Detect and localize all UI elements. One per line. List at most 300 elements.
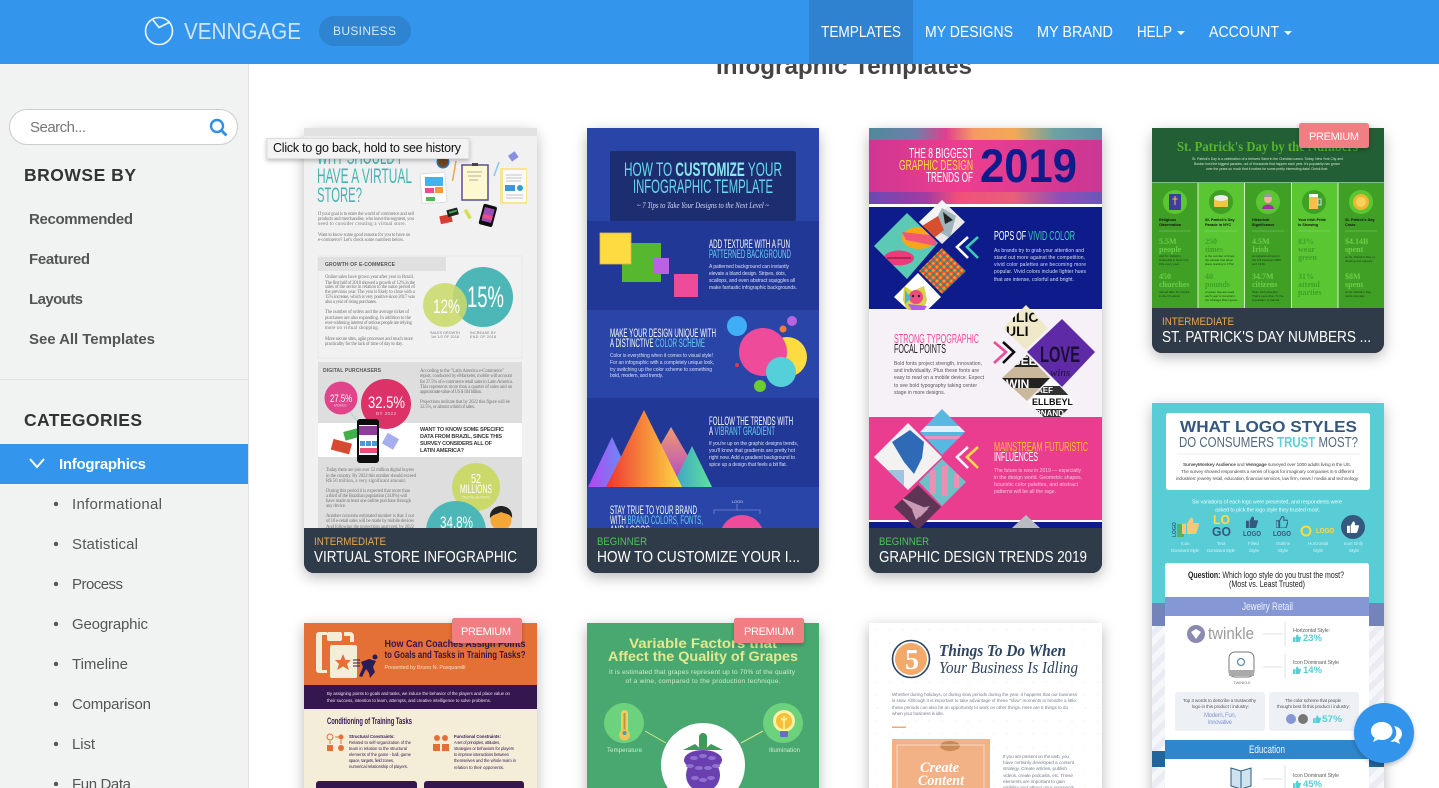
section: mainstream futuristic influences xyxy=(869,409,1102,530)
image: create content: Create xyxy=(920,760,959,776)
section: digital purchasers: for 27.5% of e-commerce retail sales in Latin America. xyxy=(420,380,513,385)
section: conditioning of training tasks: Functional Constraints: xyxy=(454,734,501,739)
thumbnail: idling business xyxy=(876,630,1098,788)
tip: color scheme: MAKE YOUR DESIGN UNIQUE WITH xyxy=(610,326,716,340)
card: what logo styles xyxy=(1152,403,1384,788)
section: strong typographic focal points: easy to read on a mobile device. Expect xyxy=(894,375,985,381)
intro strip: By assigning points to goals and tasks, we induce the behavior of the players and place value on xyxy=(327,691,511,696)
body text: strategy. Create articles, publish xyxy=(1003,766,1067,772)
banner: 8 biggest trends of 2019: TRENDS OF xyxy=(926,169,973,186)
survey panel: 14% xyxy=(1303,665,1322,675)
tip: brand colors: STAY TRUE TO YOUR BRAND xyxy=(610,503,697,517)
categories menu: Process xyxy=(72,576,123,593)
footer: level and title: INTERMEDIATE xyxy=(314,536,386,548)
tip: vibrant gradient xyxy=(587,398,819,487)
title panel: WHAT LOGO STYLES xyxy=(1180,419,1357,436)
section: mainstream futuristic influences: patterns will be all the rage. xyxy=(994,489,1056,495)
tip: brand colors xyxy=(610,500,764,559)
column 5: day costs: drinking and apparel. xyxy=(1345,259,1373,263)
column 1: religious observation: named after St. Patrick xyxy=(1159,290,1190,294)
section: digital purchasers: DATA FROM BRAZIL, SINCE THIS xyxy=(420,434,502,440)
tip: color scheme: For an infographic with a completely unique look, xyxy=(610,360,714,366)
section: conditioning of training tasks: strategies or behaviors for players xyxy=(454,746,514,751)
tip: patterned background xyxy=(587,221,819,310)
tip: patterned background: elevate a bland design. Stripes, dots, xyxy=(709,271,786,277)
section: growth of e-commerce: SALES GROWTH xyxy=(430,331,460,335)
body text: have certainly developed a content xyxy=(1003,760,1075,766)
title: why should I have a virtual store: STORE? xyxy=(317,184,362,207)
tip: color scheme xyxy=(610,316,807,392)
section: mainstream futuristic influences: futuristic color palettes, and abstract xyxy=(994,482,1079,488)
title xyxy=(939,641,1078,677)
survey panel: twinkle xyxy=(1208,624,1254,643)
column 2: parade in NYC: 40 xyxy=(1205,272,1213,281)
column 3: historical significance: citizens xyxy=(1252,280,1277,289)
footer: level and title xyxy=(1152,308,1384,353)
section: conditioning of training tasks: themselves and the whole team in xyxy=(454,758,517,763)
column 3: historical significance xyxy=(1244,183,1291,308)
survey panel: Horizontal Style: xyxy=(1293,628,1330,634)
title panel: industries: jewelry retail, education, financial services, law firm, news / media and technology. xyxy=(1176,476,1359,482)
section: digital purchasers: LATIN AMERICA? xyxy=(420,448,465,454)
column 3: historical significance: population of Ireland. xyxy=(1252,298,1280,302)
logo style icons: LOGO xyxy=(1316,528,1334,535)
section: digital purchasers: R$ 50 million, a very significant amount. xyxy=(326,479,406,484)
section: digital purchasers: DIGITAL PURCHASERS xyxy=(323,368,382,374)
section: digital purchasers: 27.5% xyxy=(330,393,352,405)
categories menu xyxy=(0,410,248,788)
categories menu: Statistical xyxy=(72,536,138,553)
intro text xyxy=(609,669,796,685)
section: conditioning of training tasks: team in relation to the structural xyxy=(349,746,407,751)
title: Variable Factors that xyxy=(629,635,777,651)
section: digital purchasers: 34.8% xyxy=(440,513,473,532)
tip: vibrant gradient: spice up a design that feels a bit flat. xyxy=(709,462,787,468)
logo style labels: Dominant Style xyxy=(1207,548,1235,553)
card: how to customize your infographic xyxy=(587,128,819,573)
thumbnail: st patrick's day: Boston host the biggest parades, out of thousands that happen each year. It's popularity has grown xyxy=(1194,162,1340,166)
section: growth of e-commerce: More secure sites, agile processes and much more xyxy=(325,337,413,342)
banner: 8 biggest trends of 2019 xyxy=(869,128,1102,204)
sidebar xyxy=(0,64,249,788)
card: coaches training tasks xyxy=(304,618,537,788)
survey panel xyxy=(1165,563,1369,788)
browse by menu: Layouts xyxy=(29,291,83,308)
section: pops of vivid color xyxy=(869,199,1102,320)
section: growth of e-commerce: 15% increase, which is very positive since 2017 was xyxy=(325,295,415,300)
logo style labels: Outline xyxy=(1276,541,1291,546)
card: variable factors of grapes xyxy=(587,618,819,788)
column 2: parade in NYC: is the number of times xyxy=(1205,254,1235,258)
icons: desk illustration xyxy=(420,151,527,227)
section: digital purchasers: MOBILE xyxy=(334,404,348,408)
thumbnail: coaches xyxy=(304,623,537,788)
column 4: your irish pride: Your Irish Pride xyxy=(1298,218,1326,222)
column 3: historical significance: Irish xyxy=(1252,245,1269,254)
section: digital purchasers: During this period it is expected that more than xyxy=(326,489,411,494)
section: growth of e-commerce: The number of orders and the average ticket of xyxy=(325,310,409,315)
section: strong typographic focal points: to see bold typography taking center xyxy=(894,383,977,389)
section: digital purchasers: Projections indicate that by 2022 this figure will be xyxy=(420,400,510,405)
column 2: parade in NYC: times xyxy=(1205,245,1223,254)
tooltip: back button hint xyxy=(267,138,469,158)
column 5: day costs: $4.14B xyxy=(1345,237,1369,246)
section: pops of vivid color: As brands try to grab your attention and xyxy=(994,248,1084,254)
section: conditioning of training tasks: Conditioning of Training Tasks xyxy=(327,716,412,726)
survey panel: Education xyxy=(1249,744,1285,756)
section: conditioning of training tasks: A set of principles, attitudes, xyxy=(454,740,500,745)
factor: illumination xyxy=(763,703,803,754)
nav menu: TEMPLATES xyxy=(821,24,901,41)
column 2: parade in NYC: each year to transform xyxy=(1205,294,1236,298)
thumbnail: st patrick's day: St. Patrick's Day is a celebration of a beloved Saint in the Christian canon. Today, New York City and xyxy=(1192,157,1343,161)
column 1: religious observation: Cathedral in New York xyxy=(1159,258,1189,262)
browse by menu: See All Templates xyxy=(29,331,155,348)
section: digital purchasers: DIGITAL BUYERS xyxy=(462,496,490,500)
connector lines xyxy=(645,731,763,743)
tip: vibrant gradient: right now. Add a gradient background to xyxy=(709,455,795,461)
badge: premium: PREMIUM xyxy=(461,626,511,638)
section: mainstream futuristic influences: The future is now in 2019 — especially xyxy=(994,468,1082,474)
footer: level and title: HOW TO CUSTOMIZE YOUR I... xyxy=(597,549,800,566)
intro text: these periods can also be an opportunity to work on other things. Here are 5 things to do xyxy=(892,705,1068,710)
icon: grape bunch xyxy=(661,723,745,788)
column 2: parade in NYC: pounds xyxy=(1205,280,1230,289)
footer: level and title xyxy=(869,528,1102,573)
logo style icons: GO xyxy=(1212,524,1231,539)
title panel xyxy=(1166,413,1370,490)
section: conditioning of training tasks: space, targets, field zones, xyxy=(349,758,394,763)
tip: patterned background: make fantastic infographic backgrounds. xyxy=(709,285,797,291)
column 5: day costs: spent xyxy=(1345,280,1364,289)
section: strong typographic focal points: STRONG TYPOGRAPHIC xyxy=(894,331,979,346)
section: strong typographic focal points: AEF xyxy=(1037,386,1053,395)
section: strong typographic focal points: FOCAL POINTS xyxy=(894,341,946,356)
title panel: SurveyMonkey Audience and Venngage surveyed over 1000 adults living in the US. xyxy=(1183,462,1351,468)
title panel: The survey showed respondents a series of logos for imaginary companies in 6 different xyxy=(1181,469,1355,475)
section: strong typographic focal points: Bold fonts project strength, innovation, xyxy=(894,361,982,367)
column 4: your irish pride: Is Showing xyxy=(1298,223,1319,227)
column 1: religious observation: Observation xyxy=(1159,223,1182,227)
factor: temperature xyxy=(604,703,644,754)
nav menu xyxy=(809,0,1292,64)
search box xyxy=(10,110,238,144)
categories menu: List xyxy=(72,736,96,753)
badge: business xyxy=(319,16,411,46)
intro text: of a wine, compared to the production technique. xyxy=(626,678,781,685)
card: st patrick's day numbers xyxy=(1152,123,1384,353)
banner: 8 biggest trends of 2019: GRAPHIC DESIGN xyxy=(899,157,973,174)
footer: level and title xyxy=(587,528,819,573)
intro text: is slow. Although it is important to take advantage of these "slow" moments to breathe a little, xyxy=(892,698,1077,703)
section: digital purchasers: a third of the Brazilian population (34.8%) will xyxy=(326,494,408,499)
logo style icons: LOGO xyxy=(1172,522,1178,537)
categories menu: Timeline xyxy=(72,656,128,673)
tip: patterned background: scallops, and even abstract squiggles all xyxy=(709,278,795,284)
body text: If you are present on the web, you xyxy=(1003,754,1069,760)
section: strong typographic focal points: WIN xyxy=(1006,377,1029,391)
section: growth of e-commerce: more on virtual shopping. xyxy=(325,326,379,331)
logo style labels: Horizontal xyxy=(1308,541,1328,546)
body text: videos, create podcasts, etc. These xyxy=(1003,773,1073,779)
logo: venngage xyxy=(146,18,301,44)
column 5: day costs: cards annually. xyxy=(1345,294,1365,298)
column 3: historical significance: the US between 1820 xyxy=(1252,258,1281,262)
column 1: religious observation: people xyxy=(1159,245,1182,254)
badge: business: BUSINESS xyxy=(333,24,396,38)
section: digital purchasers: approximate value of US $ 104 billion. xyxy=(420,390,482,395)
column 5: day costs: on St. Patrick's Day xyxy=(1345,290,1372,294)
page heading: Infographic Templates: Infographic Templates xyxy=(716,53,972,80)
section: growth of e-commerce: INCREASE BY xyxy=(470,331,497,335)
section: digital purchasers: of 10 e-retail sales will be made by mobile devices xyxy=(326,519,414,524)
chat button xyxy=(1354,703,1414,763)
section: growth of e-commerce: the previous year. The year is likely to close with a xyxy=(325,290,416,295)
section: growth of e-commerce: The first half of 2018 showed a growth of 12% in the xyxy=(325,281,415,286)
intro paragraph: Want to know some good reasons for you to have an xyxy=(318,233,411,238)
column 3: historical significance: and 1930. xyxy=(1252,262,1266,266)
survey panel: The color scheme that people xyxy=(1285,698,1341,703)
column 4: your irish pride: 83% xyxy=(1298,237,1314,246)
section: digital purchasers xyxy=(318,362,522,561)
column 3: historical significance: 34.7M xyxy=(1252,272,1274,281)
column 5: day costs: spent xyxy=(1345,245,1364,254)
footer: level and title: INTERMEDIATE xyxy=(1162,316,1234,328)
title: why should I have a virtual store xyxy=(317,146,412,207)
title: why should I have a virtual store: WHY SHOULD I xyxy=(317,146,401,169)
section: growth of e-commerce: purchases are also expanding. In addition to the xyxy=(325,316,411,321)
column 1: religious observation: City every year. xyxy=(1159,262,1180,266)
section: digital purchasers: This represents more than a quarter of sales and an xyxy=(420,385,513,390)
logo style labels: Style xyxy=(1349,548,1360,553)
column 3: historical significance: Significance xyxy=(1252,223,1274,227)
column 5: day costs: on St. Patrick's Day on xyxy=(1345,255,1376,259)
section: pops of vivid color: stand out more against the competition, xyxy=(994,255,1085,261)
tooltip: back button hint: Click to go back, hold to see history xyxy=(273,141,462,155)
title: Your Business Is Idling xyxy=(939,658,1078,677)
intro text: Six variations of each logo were presented, and respondents were xyxy=(1192,500,1342,506)
section: strong typographic focal points xyxy=(869,305,1102,425)
body text: elements are important to gain xyxy=(1003,779,1065,785)
tip: patterned background: A patterned background can instantly xyxy=(709,264,790,270)
footer: level and title xyxy=(304,528,537,573)
column 2: parade in NYC: Parade in NYC xyxy=(1205,223,1231,227)
intro text: Whether during holidays, or during slow periods during the year, it happens that our business xyxy=(892,692,1078,697)
survey panel: 57% xyxy=(1322,714,1342,724)
column 1: religious observation xyxy=(1152,183,1198,308)
survey panel: Icon Dominant Style xyxy=(1293,660,1339,666)
logo style labels: Style xyxy=(1313,548,1324,553)
column 1: religious observation: in the US alone. xyxy=(1159,294,1181,298)
tip: vibrant gradient: If you're up on the graphic designs trends, xyxy=(709,441,798,447)
number badge: 5: 5 xyxy=(905,645,919,676)
section: conditioning of training tasks: Related to self-organization of the xyxy=(349,740,412,745)
section: growth of e-commerce: ever-widening interest of serious people are relying xyxy=(325,321,413,326)
logo style labels: Dominant Style xyxy=(1171,548,1199,553)
column 5: day costs: Costs xyxy=(1345,223,1356,227)
intro text: asked to pick the logo style they trusted most. xyxy=(1215,508,1320,514)
intro strip: their success, intention to learn, attempts, and creative intelligence to solve problems. xyxy=(327,698,491,703)
section: conditioning of training tasks: elements of the game - ball, game xyxy=(349,752,412,757)
intro text xyxy=(1192,500,1342,514)
footer: level and title: GRAPHIC DESIGN TRENDS 2019 xyxy=(879,549,1087,566)
section: digital purchasers: WANT TO KNOW SOME SPECIFIC xyxy=(420,427,504,433)
section: growth of e-commerce: also a year of rising purchases. xyxy=(325,300,377,305)
survey panel: Modern, Fun, xyxy=(1204,713,1236,719)
survey panel: TWINKLE xyxy=(1233,680,1251,685)
card: virtual store infographic xyxy=(304,128,537,573)
column 4: your irish pride: attend xyxy=(1298,280,1320,289)
column 4: your irish pride: green xyxy=(1298,253,1318,262)
section: conditioning of training tasks: to improve interactions between xyxy=(454,752,510,757)
browse by menu: Recommended xyxy=(29,211,133,228)
section: conditioning of training tasks: Structural Constraints: xyxy=(349,734,395,739)
column 2: parade in NYC: the Chicago River green. xyxy=(1205,298,1238,302)
section: mainstream futuristic influences: in the design world. Geometric shapes, xyxy=(994,475,1082,481)
badge: premium xyxy=(1299,123,1369,148)
column 3: historical significance: Historical xyxy=(1252,218,1269,222)
logo style labels: Text xyxy=(1217,541,1226,546)
section: digital purchasers: 32.5% xyxy=(368,393,405,412)
column 3: historical significance: immigrants arrived in xyxy=(1252,254,1280,258)
survey panel: thought best fit this product / industry: xyxy=(1277,704,1350,709)
nav menu: MY BRAND xyxy=(1037,24,1113,41)
footer: level and title: VIRTUAL STORE INFOGRAPHIC xyxy=(314,549,517,566)
column 3: historical significance: claim Irish ancestry. xyxy=(1252,290,1278,294)
icon: clipboard and runner xyxy=(316,632,378,678)
survey panel: logo in this product / industry: xyxy=(1192,704,1249,709)
section: conditioning of training tasks xyxy=(316,716,524,788)
thumbnail: grapes xyxy=(604,635,803,788)
column 2: parade in NYC: the parade has taken xyxy=(1205,258,1234,262)
section: growth of e-commerce: 15% xyxy=(467,281,504,314)
title panel: ~ 7 Tips to Take Your Designs to the Next Level ~ xyxy=(637,201,770,210)
section: growth of e-commerce: GROWTH OF E-COMMERCE xyxy=(325,262,396,268)
banner: 8 biggest trends of 2019: 2019 xyxy=(980,139,1077,192)
section: strong typographic focal points: ILIC xyxy=(1012,309,1038,325)
factor: illumination: Illumination xyxy=(769,748,800,754)
section: digital purchasers: have made at least one online purchase through xyxy=(326,499,412,504)
card: things to do when business is idling xyxy=(869,623,1102,788)
column 5: day costs: St. Patrick's Day xyxy=(1345,218,1375,222)
section: digital purchasers: According to the "Latin America e-Commerce" xyxy=(420,369,504,374)
top navigation bar xyxy=(0,0,1439,64)
logo style labels xyxy=(1171,541,1364,553)
categories menu: Comparison xyxy=(72,696,151,713)
column 1: religious observation: 5.5M xyxy=(1159,237,1177,246)
column 2: parade in NYC: of green dye are used xyxy=(1205,290,1235,294)
section: digital purchasers: SURVEY CONSIDERS ALL OF xyxy=(420,441,493,447)
heading text: Presented by Bruno N. Pasquarelli xyxy=(384,665,466,671)
column 1: religious observation: visit St. Patrick's xyxy=(1159,254,1181,258)
logo style icons: LO xyxy=(1213,512,1230,527)
title xyxy=(608,635,798,664)
logo style labels: Filled xyxy=(1248,541,1259,546)
thumbnail: design trends xyxy=(869,128,1102,528)
column 2: parade in NYC: place starting in 1762. xyxy=(1205,262,1235,266)
nav menu: HELP xyxy=(1137,24,1172,41)
intro paragraph xyxy=(318,212,415,243)
footer: level and title: BEGINNER xyxy=(597,536,647,548)
survey panel: (Most vs. Least Trusted) xyxy=(1229,579,1305,589)
section: growth of e-commerce: Online sales have grown year after year in Brazil. xyxy=(325,275,414,280)
column 1: religious observation: 450 xyxy=(1159,272,1171,281)
section: pops of vivid color: popular. Vivid colors include lighter hues xyxy=(994,269,1086,275)
factor: temperature: Temperature xyxy=(607,748,643,754)
footer: level and title: BEGINNER xyxy=(879,536,929,548)
section: digital purchasers: in the country. By 2022 this number should exceed xyxy=(326,474,417,479)
thumbnail: st patrick's day: St. Patrick's Day by the Numbers xyxy=(1177,140,1358,155)
survey panel: Question: Which logo style do you trust the most? xyxy=(1188,570,1344,580)
badge: premium xyxy=(734,618,804,643)
intro paragraph: If your goal is to enter the world of commerce and sell xyxy=(318,212,415,217)
section: strong typographic focal points: LOVE xyxy=(1040,342,1080,367)
title: Things To Do When xyxy=(939,641,1066,660)
badge: premium: PREMIUM xyxy=(744,626,794,638)
column 1: religious observation: churches xyxy=(1159,280,1190,289)
column 5: day costs xyxy=(1338,183,1384,308)
nav menu: ACCOUNT xyxy=(1209,24,1279,41)
section: digital purchasers: BY 2022 xyxy=(376,411,396,416)
section: digital purchasers: any device. xyxy=(326,504,346,509)
survey panel: Icon Dominant Style xyxy=(1293,773,1339,779)
section: growth of e-commerce: 1st 1/2 OF 2018 xyxy=(431,335,459,339)
section: conditioning of training tasks: numerical relationship of players. xyxy=(349,764,408,769)
tip: color scheme: Color is everything when it comes to visual style! xyxy=(610,353,713,359)
section: strong typographic focal points: RNAND xyxy=(1035,409,1064,418)
intro text: It is estimated that grapes represent up to 70% of the quality xyxy=(609,669,796,676)
browse by menu: Featured xyxy=(29,251,90,268)
heading text xyxy=(384,638,526,671)
column 2: parade in NYC: St. Patrick's Day xyxy=(1205,218,1235,222)
tip: brand colors: LOGO xyxy=(732,500,743,504)
section: digital purchasers: 32.5%, or almost a third of sales. xyxy=(420,405,475,410)
body text xyxy=(1003,754,1075,788)
section: digital purchasers: And following the projections analyzed, by 2022 xyxy=(326,525,415,530)
categories menu: Informational xyxy=(72,496,162,513)
logo: venngage: VENNGAGE xyxy=(184,18,301,44)
badge: premium xyxy=(452,618,522,643)
column 3: historical significance: 4.5M xyxy=(1252,237,1270,246)
section: growth of e-commerce: practicality for the lack of time of day to day. xyxy=(325,342,403,347)
intro paragraph: need to consider creating a virtual store. xyxy=(318,222,406,227)
categories menu: Infographics xyxy=(59,456,146,473)
badge: premium: PREMIUM xyxy=(1309,131,1359,143)
logo style icons: LOGO xyxy=(1273,531,1291,538)
logo style icons xyxy=(1172,512,1365,539)
section: growth of e-commerce: END OF 2018 xyxy=(470,335,496,339)
section: conditioning of training tasks: relation to their opponents. xyxy=(454,765,504,770)
title: Affect the Quality of Grapes xyxy=(608,648,798,664)
title: why should I have a virtual store: HAVE A VIRTUAL xyxy=(317,165,412,188)
logo style labels: Icon Only xyxy=(1344,541,1364,546)
section: strong typographic focal points: BEE xyxy=(1012,354,1037,368)
categories menu: CATEGORIES xyxy=(24,410,142,430)
column 5: day costs: $8M xyxy=(1345,272,1361,281)
column 4: your irish pride: parties xyxy=(1298,288,1322,297)
intro text xyxy=(892,692,1078,716)
footer: level and title: ST. PATRICK'S DAY NUMBERS ... xyxy=(1162,329,1371,346)
section: digital purchasers: 52 xyxy=(471,471,481,486)
thumbnail: customize template xyxy=(587,128,819,537)
browse by menu: BROWSE BY xyxy=(24,165,136,185)
title panel: DO CONSUMERS TRUST MOST? xyxy=(1179,434,1358,451)
survey panel: Jewelry Retail xyxy=(1242,601,1293,613)
tip: color scheme: try switching up the color scheme to something xyxy=(610,367,712,373)
image: create content xyxy=(892,739,990,788)
logo style icons: LOGO xyxy=(1243,531,1261,538)
thumbnail: virtual store xyxy=(304,128,537,532)
